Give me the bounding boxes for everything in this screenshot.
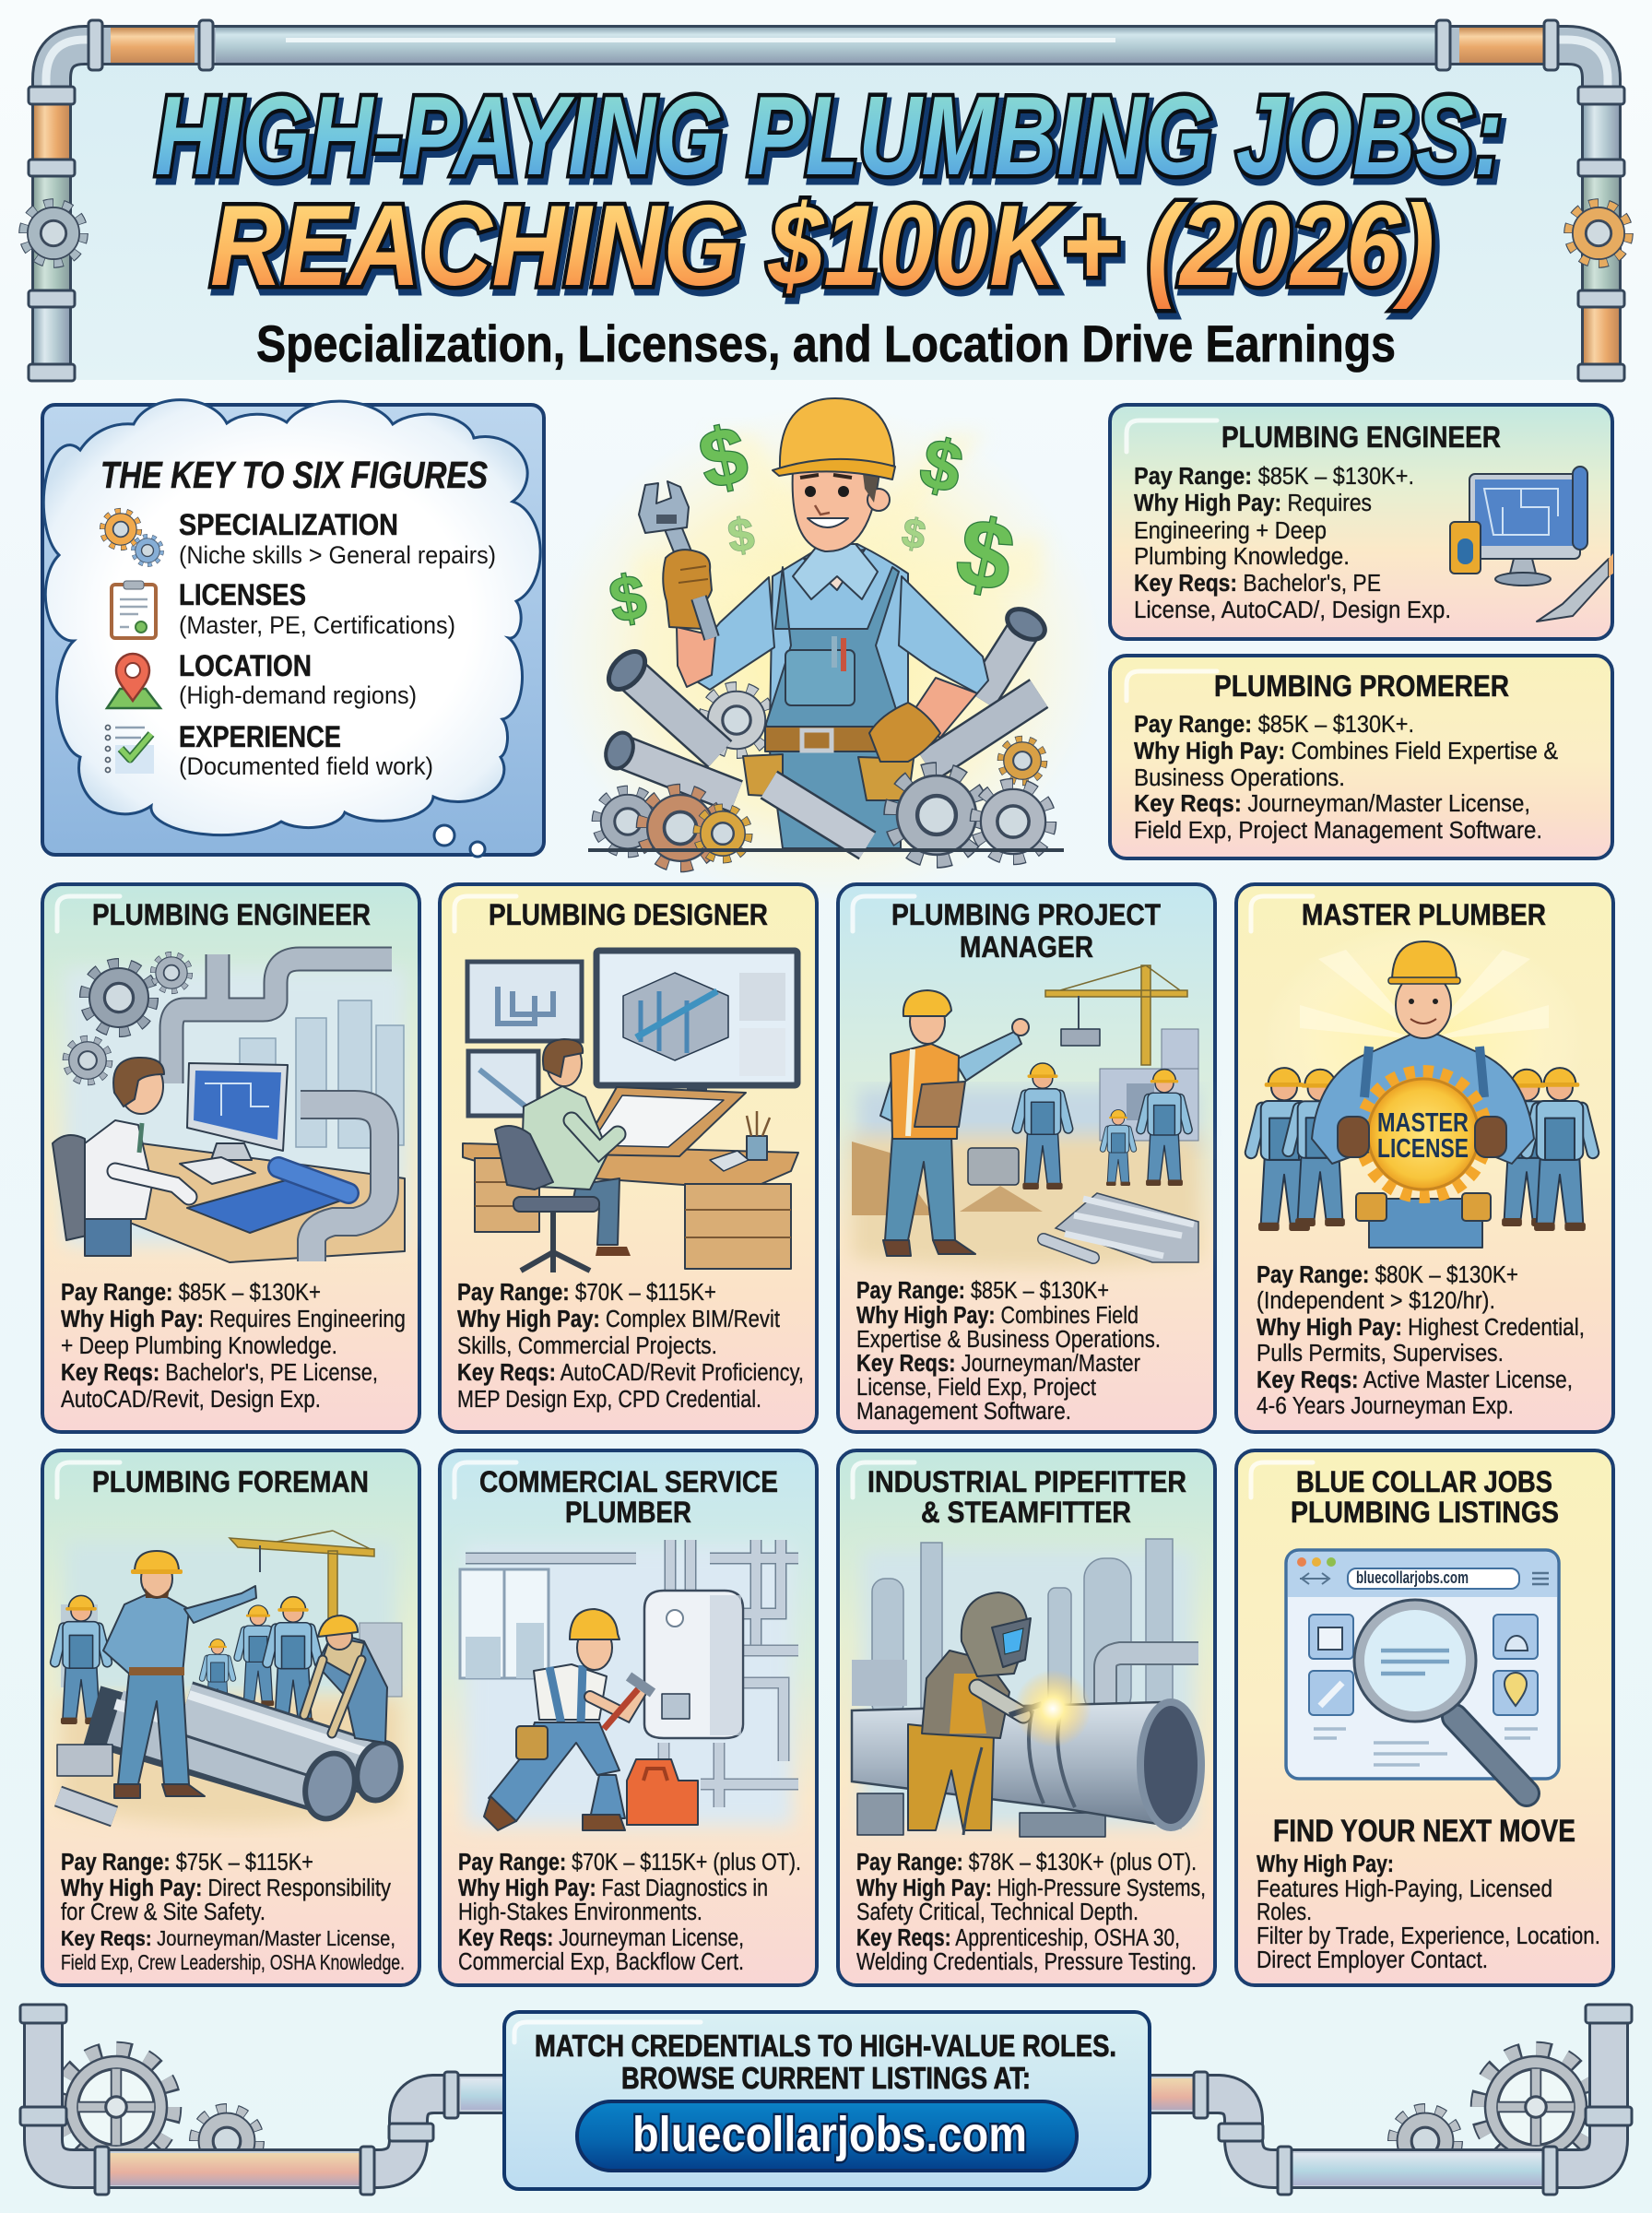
heading	[867, 1465, 1186, 1529]
card: plumbing engineer	[42, 884, 419, 1432]
header pipe frame	[24, 20, 1628, 381]
text block: License, AutoCAD/, Design Exp.	[1134, 598, 1451, 623]
illustration: foreman directing crew	[55, 1531, 407, 1825]
card: plumbing project manager	[838, 884, 1215, 1432]
text block: MEP Design Exp, CPD Credential.	[457, 1387, 761, 1413]
card: commercial service plumber	[440, 1450, 817, 1985]
text block: Engineering + Deep	[1134, 518, 1327, 544]
illustration: engineer at desk	[53, 954, 406, 1262]
icon: checklist	[105, 725, 154, 774]
icon: location pin	[107, 654, 160, 708]
card: master plumber	[1236, 884, 1613, 1432]
item: experience: (Documented field work)	[179, 752, 433, 780]
card: blue collar jobs plumbing listings	[1236, 1450, 1613, 1985]
item: specialization: (Niche skills > General repairs)	[179, 541, 496, 569]
text block: Management Software.	[856, 1399, 1071, 1425]
text block: Why High Pay: Combines Field	[856, 1303, 1139, 1329]
wrench	[639, 481, 712, 638]
badge text: LICENSE	[1377, 1134, 1469, 1164]
text block: Plumbing Knowledge.	[1134, 544, 1350, 570]
badge text	[1377, 1108, 1469, 1164]
text block: High-Stakes Environments.	[458, 1899, 702, 1925]
text block: Skills, Commercial Projects.	[457, 1333, 717, 1359]
text block: Why High Pay: Direct Responsibility	[61, 1876, 391, 1901]
text block	[61, 1850, 405, 1974]
text block	[1257, 1852, 1600, 1973]
text block: Key Reqs: Active Master License,	[1257, 1367, 1573, 1393]
plumber body	[677, 544, 988, 848]
illustration: plumber with wrench, pipes and dollars	[549, 398, 1103, 904]
text block: Welding Credentials, Pressure Testing.	[856, 1949, 1197, 1975]
text block: Why High Pay: Highest Credential,	[1257, 1315, 1585, 1341]
text block: Why High Pay: Combines Field Expertise &	[1134, 739, 1558, 764]
url text: bluecollarjobs.com	[1356, 1568, 1469, 1587]
illustration: welder on large pipe	[852, 1539, 1201, 1837]
heading: PLUMBING PROMERER	[1214, 669, 1509, 703]
thought cloud	[43, 400, 540, 835]
sub heading: FIND YOUR NEXT MOVE	[1273, 1814, 1575, 1849]
front gears	[597, 771, 1050, 865]
text block: Why High Pay:	[1257, 1852, 1394, 1877]
text block: Pay Range: $85K – $130K+	[856, 1278, 1109, 1304]
icon: monitor with blueprint, tablet and pen	[1450, 467, 1613, 621]
card: industrial pipefitter and steamfitter	[838, 1450, 1215, 1985]
title line 2: REACHING $100K+ (2026)	[214, 188, 1438, 315]
text block: Pay Range: $70K – $115K+	[457, 1280, 716, 1306]
text block	[856, 1850, 1206, 1975]
item: licenses: LICENSES	[179, 578, 306, 611]
text block: Why High Pay: Requires	[1134, 491, 1372, 516]
text block: Pay Range: $70K – $115K+ (plus OT).	[458, 1850, 801, 1876]
back pipes and gears	[601, 603, 1050, 797]
call to action text: BROWSE CURRENT LISTINGS AT:	[621, 2061, 1031, 2095]
illustration: master plumber with license badge	[1251, 925, 1593, 1248]
item: specialization: SPECIALIZATION	[179, 508, 398, 541]
heading: MASTER PLUMBER	[1302, 898, 1546, 931]
title	[155, 73, 1506, 315]
heading: & STEAMFITTER	[921, 1496, 1131, 1529]
heading: PLUMBING LISTINGS	[1291, 1496, 1559, 1529]
heading	[1291, 1465, 1559, 1529]
icon: right gear	[1569, 204, 1628, 263]
footer pipes left	[20, 2005, 503, 2197]
text block: Field Exp, Project Management Software.	[1134, 818, 1542, 844]
panel: plumbing promerer summary	[1110, 656, 1612, 858]
card: plumbing foreman	[42, 1450, 419, 1985]
text block	[61, 1280, 406, 1413]
text block: Why High Pay: Requires Engineering	[61, 1307, 406, 1332]
card: plumbing designer	[440, 884, 817, 1432]
text block	[1257, 1262, 1585, 1419]
text block	[1134, 464, 1451, 623]
thought bubbles	[434, 825, 485, 857]
dollar signs	[605, 408, 1022, 636]
text block: + Deep Plumbing Knowledge.	[61, 1333, 337, 1359]
text block: Commercial Exp, Backflow Cert.	[458, 1949, 744, 1975]
text block: Why High Pay: Complex BIM/Revit	[457, 1307, 780, 1332]
text block: for Crew & Site Safety.	[61, 1899, 266, 1925]
illustration: designer at drafting table	[463, 951, 798, 1272]
call to action text: MATCH CREDENTIALS TO HIGH-VALUE ROLES.	[535, 2029, 1116, 2063]
item: licenses	[179, 578, 455, 639]
panel: plumbing engineer summary	[1110, 405, 1613, 639]
heading: MANAGER	[960, 930, 1093, 964]
heading: BLUE COLLAR JOBS	[1296, 1465, 1552, 1498]
text block: Pay Range: $85K – $130K+	[61, 1280, 321, 1306]
subtitle: Specialization, Licenses, and Location Drive Earnings	[256, 314, 1396, 373]
icon: gears	[103, 512, 161, 564]
text block: License, Field Exp, Project	[856, 1375, 1096, 1401]
text block: AutoCAD/Revit, Design Exp.	[61, 1387, 321, 1413]
text block: Key Reqs: Journeyman License,	[458, 1925, 744, 1951]
heading: PLUMBER	[565, 1496, 691, 1529]
text block: (Independent > $120/hr).	[1257, 1288, 1495, 1314]
illustration: site manager pointing	[852, 965, 1200, 1268]
illustration: plumber repairing water heater	[460, 1540, 798, 1830]
text block: Key Reqs: Journeyman/Master License,	[61, 1926, 395, 1950]
item: experience: EXPERIENCE	[179, 720, 341, 753]
dollar signs: $	[913, 423, 970, 509]
text block: Why High Pay: High-Pressure Systems,	[856, 1876, 1206, 1901]
dollar signs: $	[605, 562, 651, 636]
text block: Key Reqs: Journeyman/Master License,	[1134, 791, 1530, 817]
text block: Roles.	[1257, 1899, 1312, 1925]
text block: Expertise & Business Operations.	[856, 1327, 1161, 1353]
text block: Key Reqs: Journeyman/Master	[856, 1351, 1140, 1377]
text block: Business Operations.	[1134, 765, 1345, 791]
item: licenses: (Master, PE, Certifications)	[179, 611, 455, 639]
head and hard hat	[773, 398, 895, 551]
heading: PLUMBING FOREMAN	[92, 1465, 369, 1498]
item: location: LOCATION	[179, 649, 312, 682]
ground line	[588, 848, 1064, 852]
text block: Key Reqs: Bachelor's, PE	[1134, 571, 1381, 597]
text block: Key Reqs: AutoCAD/Revit Proficiency,	[457, 1360, 804, 1386]
text block: Pay Range: $75K – $115K+	[61, 1850, 313, 1876]
text block: Direct Employer Contact.	[1257, 1947, 1488, 1973]
item: experience	[179, 720, 433, 780]
heading: PLUMBING DESIGNER	[489, 898, 768, 931]
icon: left gear	[24, 204, 83, 263]
footer pipes right	[1150, 2005, 1632, 2197]
text block	[856, 1278, 1161, 1425]
cloud heading: THE KEY TO SIX FIGURES	[100, 454, 488, 496]
text block: Pay Range: $85K – $130K+.	[1134, 712, 1414, 738]
text block: Pay Range: $78K – $130K+ (plus OT).	[856, 1850, 1197, 1876]
item: specialization	[179, 508, 496, 569]
text block	[1134, 712, 1558, 844]
icon: clipboard	[112, 581, 156, 638]
dollar signs: $	[948, 498, 1022, 613]
heading: COMMERCIAL SERVICE	[479, 1465, 778, 1498]
dollar signs: $	[725, 508, 758, 562]
heading: PLUMBING ENGINEER	[92, 898, 371, 931]
heading	[891, 898, 1161, 964]
panel: the key to six figures	[42, 400, 544, 857]
heading: PLUMBING ENGINEER	[1221, 420, 1501, 454]
text block: Pay Range: $80K – $130K+	[1257, 1262, 1518, 1288]
title line 2: REACHING $100K+ (2026)	[210, 183, 1434, 310]
badge text: MASTER	[1377, 1108, 1469, 1138]
url button: bluecollarjobs.com	[632, 2107, 1027, 2162]
text block: Features High-Paying, Licensed	[1257, 1876, 1552, 1902]
text block: Pulls Permits, Supervises.	[1257, 1341, 1504, 1367]
text block	[458, 1850, 801, 1975]
item: location: (High-demand regions)	[179, 681, 417, 709]
text block: Key Reqs: Apprenticeship, OSHA 30,	[856, 1925, 1180, 1951]
text block: Filter by Trade, Experience, Location.	[1257, 1923, 1600, 1949]
call to action text	[535, 2029, 1116, 2095]
text block: Why High Pay: Fast Diagnostics in	[458, 1876, 768, 1901]
footer call to action	[504, 2012, 1150, 2189]
text block: 4-6 Years Journeyman Exp.	[1257, 1393, 1514, 1419]
illustration: browser with magnifying glass	[1286, 1550, 1559, 1793]
text block: Field Exp, Crew Leadership, OSHA Knowledge.	[61, 1950, 405, 1974]
heading	[479, 1465, 778, 1529]
item: location	[179, 649, 417, 709]
dollar signs: $	[899, 510, 928, 558]
text block	[457, 1280, 804, 1413]
text block: Pay Range: $85K – $130K+.	[1134, 464, 1414, 490]
text block: Key Reqs: Bachelor's, PE License,	[61, 1360, 378, 1386]
heading: INDUSTRIAL PIPEFITTER	[867, 1465, 1186, 1498]
dollar signs: $	[691, 408, 755, 506]
text block: Safety Critical, Technical Depth.	[856, 1899, 1139, 1925]
heading: PLUMBING PROJECT	[891, 898, 1161, 931]
